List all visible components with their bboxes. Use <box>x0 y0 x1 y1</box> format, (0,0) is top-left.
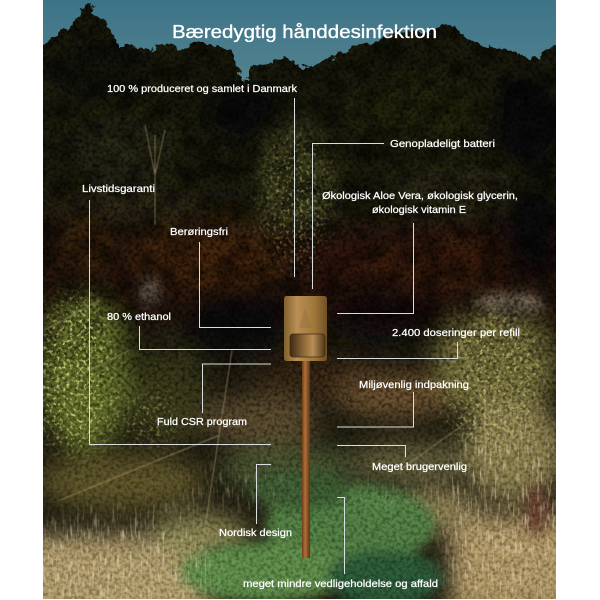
callout: Genopladeligt batteri: Genopladeligt batteri <box>390 138 495 150</box>
icon: dispenser unit <box>284 296 327 361</box>
callout: Miljøvenlig indpakning <box>337 379 469 427</box>
leaf highlights <box>43 130 556 480</box>
callout: Berøringsfri <box>170 226 271 328</box>
callout: Genopladeligt batteri <box>312 138 495 289</box>
callout: 80 % ethanol: 80 % ethanol <box>107 311 171 323</box>
callout: Miljøvenlig indpakning: Miljøvenlig indpakning <box>359 379 469 391</box>
icon: dispenser pole <box>302 361 310 558</box>
callout: meget mindre vedligeholdelse: meget mindre vedligeholdelse og affald <box>243 578 438 590</box>
dry grass texture <box>43 400 556 600</box>
grass stalks and trunks <box>45 125 505 560</box>
callout: Livstidsgaranti: Livstidsgaranti <box>82 183 155 195</box>
callout: 100 % produceret: 100 % produceret og samlet i Danmark <box>107 83 298 95</box>
callout: 2.400 doseringer: 2.400 doseringer per refill <box>392 327 520 339</box>
callout: Fuld CSR program: Fuld CSR program <box>157 416 247 428</box>
callout: meget mindre vedligeholdelse <box>243 498 438 590</box>
green path <box>140 275 549 600</box>
callout: Nordisk design <box>219 464 292 539</box>
callout: Økologisk ingredienser: økologisk vitamin E <box>372 204 466 216</box>
callout: 80 % ethanol <box>107 311 271 350</box>
callout: Nordisk design: Nordisk design <box>219 527 292 539</box>
callout: Meget brugervenlig: Meget brugervenlig <box>372 461 467 473</box>
callout: Økologisk ingredienser <box>322 190 518 314</box>
callout: Meget brugervenlig <box>337 446 467 473</box>
callout: Økologisk ingredienser: Økologisk Aloe Vera, økologisk glycerin, <box>322 190 518 202</box>
callout: Fuld CSR program <box>157 364 271 428</box>
title: Bæredygtig hånddesinfektion <box>172 21 437 42</box>
callout: 2.400 doseringer <box>337 327 520 358</box>
callout: Livstidsgaranti <box>82 183 271 444</box>
sky <box>43 0 556 84</box>
callout: Berøringsfri: Berøringsfri <box>170 226 228 238</box>
large dark patches <box>43 0 556 400</box>
